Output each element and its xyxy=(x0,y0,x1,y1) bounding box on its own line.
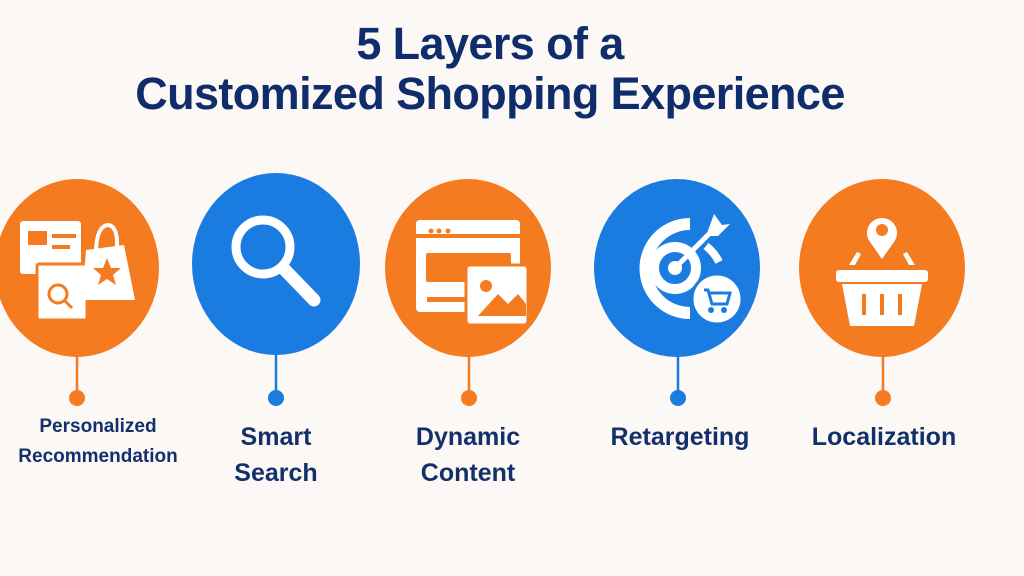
label: smart search xyxy=(234,423,318,487)
label: personalized recommendation: Recommendation xyxy=(18,446,178,467)
title: 5 Layers of a xyxy=(356,18,624,69)
label: dynamic content: Content xyxy=(421,459,515,487)
label: dynamic content xyxy=(416,423,520,487)
panel: retargeting xyxy=(594,179,760,406)
icon: magnifier xyxy=(236,220,314,300)
label: dynamic content: Dynamic xyxy=(416,423,520,451)
title: Customized Shopping Experience xyxy=(135,68,845,119)
icon: browser with image xyxy=(416,220,528,325)
icon: target with cart xyxy=(646,214,742,324)
panel: dynamic content xyxy=(385,179,551,406)
icon: product cards and bag xyxy=(20,221,135,320)
label: retargeting: Retargeting xyxy=(611,423,749,451)
label: personalized recommendation xyxy=(18,416,178,467)
label: personalized recommendation: Personalized xyxy=(39,416,157,437)
label: smart search: Smart xyxy=(241,423,311,451)
panel: smart search xyxy=(192,173,360,406)
icon: basket with pin xyxy=(836,218,928,326)
panel: localization xyxy=(799,179,965,406)
label: localization: Localization xyxy=(812,423,956,451)
label: smart search: Search xyxy=(234,459,318,487)
title xyxy=(135,18,845,119)
panel: personalized recommendation xyxy=(0,179,159,406)
